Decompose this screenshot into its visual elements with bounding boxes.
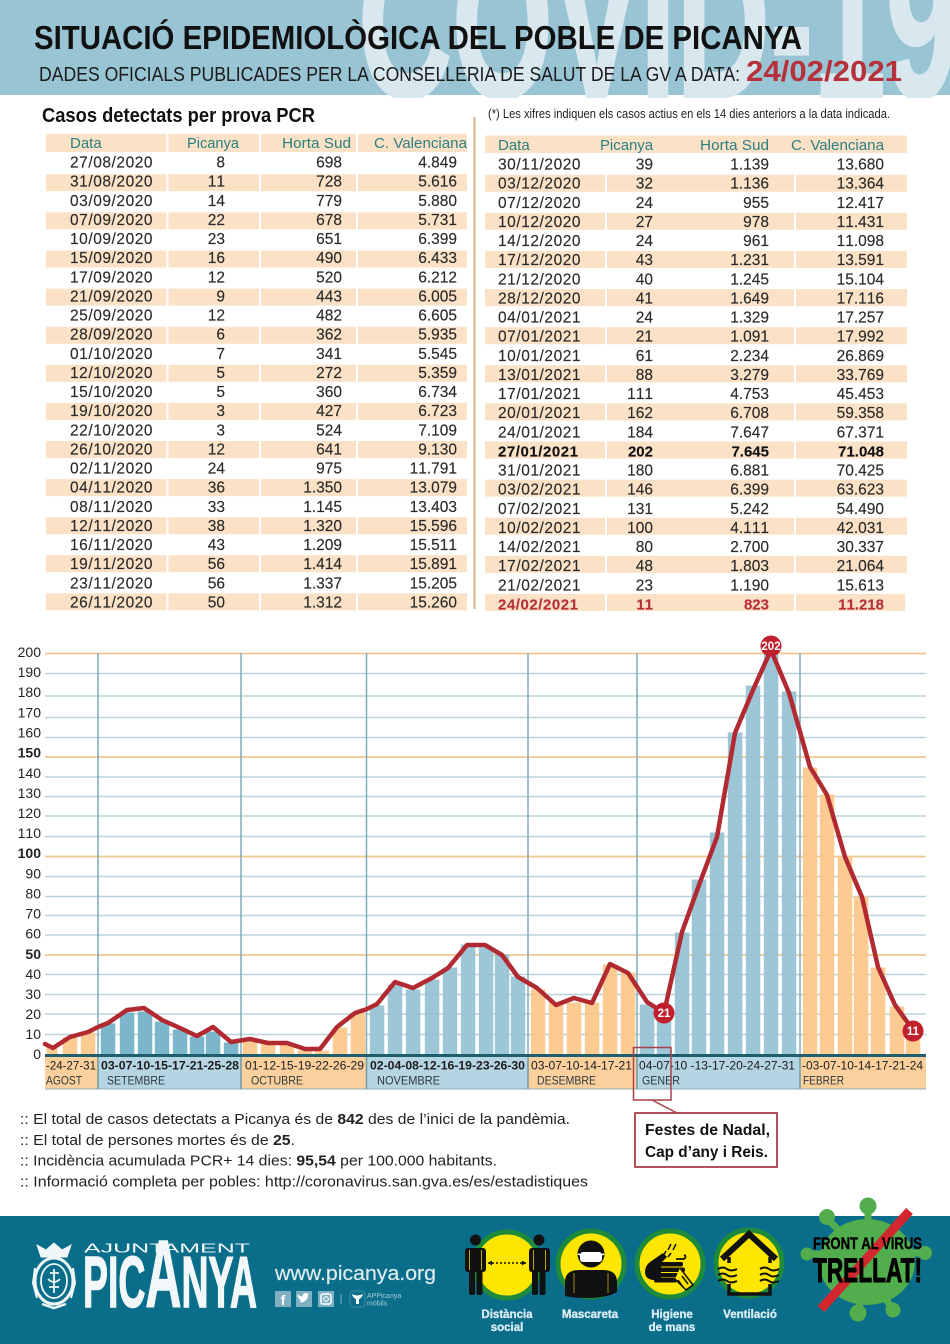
x axis date labels: 04-07-10 -13-17-20-24-27-31 xyxy=(639,1058,795,1072)
panel: left data table xyxy=(46,130,468,615)
y axis labels: 40 xyxy=(25,966,41,982)
left table rows: 6 xyxy=(216,327,225,344)
x axis month labels: NOVEMBRE xyxy=(377,1076,440,1088)
right table rows: 17.116 xyxy=(837,290,884,307)
left table rows: 38 xyxy=(208,518,225,535)
left table rows: 16 xyxy=(208,250,225,267)
left table rows: 03/09/2020 xyxy=(70,193,153,210)
left table header: Horta Sud xyxy=(282,135,351,152)
callout: holidays: Cap d’any i Reis. xyxy=(645,1144,768,1161)
right table rows: 13.591 xyxy=(837,252,884,269)
left table rows: 4.849 xyxy=(418,154,457,172)
right table rows: 15.613 xyxy=(837,577,884,594)
x axis month labels: OCTUBRE xyxy=(251,1076,303,1088)
right table rows: 1.245 xyxy=(730,271,769,288)
x axis month labels: AGOST xyxy=(46,1076,82,1088)
trend line xyxy=(45,650,913,1049)
icon labels: de mans xyxy=(649,1322,695,1334)
left table rows: 5 xyxy=(216,384,225,401)
x axis date labels: -24-27-31 xyxy=(46,1058,96,1072)
logo: Ajuntament Picanya: AJUNTAMENT xyxy=(84,1242,251,1256)
right table rows: 6.399 xyxy=(730,482,769,499)
left table rows: 5.545 xyxy=(418,346,457,363)
right table rows: 21/12/2020 xyxy=(498,271,581,288)
left table rows: 13.403 xyxy=(410,499,457,516)
right table rows: 43 xyxy=(636,252,653,269)
right table rows: 88 xyxy=(636,367,653,384)
right table rows: 1.190 xyxy=(730,577,769,594)
left table rows: 56 xyxy=(208,575,225,592)
y axis labels: 60 xyxy=(25,926,41,942)
left table rows: 31/08/2020 xyxy=(70,174,153,191)
right table rows: 961 xyxy=(743,233,769,250)
right table rows: 67.371 xyxy=(837,424,884,441)
y axis labels xyxy=(18,644,41,1062)
y axis labels: 190 xyxy=(18,664,41,680)
right table rows: 80 xyxy=(636,539,653,556)
left table rows: 15.511 xyxy=(410,537,457,554)
right table rows: 30.337 xyxy=(837,539,884,556)
left table rows: 56 xyxy=(208,556,225,573)
right table rows: 20/01/2021 xyxy=(498,405,581,422)
marker: peak 202 xyxy=(760,636,782,656)
right table rows: 10/12/2020 xyxy=(498,214,581,231)
x axis month labels: SETEMBRE xyxy=(107,1076,165,1088)
left table rows: 6.005 xyxy=(418,288,457,305)
right table rows: 14/02/2021 xyxy=(498,539,581,556)
right table rows: 2.700 xyxy=(730,539,769,556)
x axis date labels: 02-04-08-12-16-19-23-26-30 xyxy=(370,1058,525,1072)
left table rows: 12/11/2020 xyxy=(70,518,153,535)
left table rows: 6.734 xyxy=(418,384,457,401)
y axis labels: 90 xyxy=(25,866,41,882)
icon labels: Ventilació xyxy=(723,1309,777,1321)
left table rows: 9 xyxy=(216,288,225,305)
left table rows: 6.212 xyxy=(418,269,457,286)
right table rows: 54.490 xyxy=(837,501,884,518)
left table rows: 13.079 xyxy=(410,480,457,497)
y axis labels: 50 xyxy=(25,946,41,962)
y axis labels: 10 xyxy=(25,1026,41,1042)
left table rows: 7.109 xyxy=(418,422,457,439)
icon: municipal crest xyxy=(33,1243,75,1308)
left table rows: 427 xyxy=(316,403,342,420)
right table rows: 30/11/2020 xyxy=(498,156,581,174)
left table rows: 443 xyxy=(316,288,342,305)
x axis month labels: DESEMBRE xyxy=(537,1076,596,1088)
right table rows: 978 xyxy=(743,214,769,231)
right table rows: 27 xyxy=(636,214,653,231)
left table rows: 341 xyxy=(316,346,342,363)
icon labels: Mascareta xyxy=(562,1309,619,1321)
right table rows: 63.623 xyxy=(837,482,884,499)
right table header: Horta Sud xyxy=(700,137,769,154)
right table rows: 131 xyxy=(627,501,653,518)
right table rows: 11.431 xyxy=(837,214,884,231)
icon: face mask xyxy=(558,1231,624,1298)
left table rows: 9.130 xyxy=(418,442,457,458)
right table rows: 1.136 xyxy=(730,176,769,193)
icon: social media xyxy=(275,1291,401,1308)
right table rows: 42.031 xyxy=(837,520,884,537)
right table rows: 13.680 xyxy=(837,156,884,174)
left table rows: 12 xyxy=(208,269,225,286)
left table rows: 22/10/2020 xyxy=(70,422,153,439)
left table rows: 15.596 xyxy=(410,518,457,535)
right table rows: 61 xyxy=(636,348,653,365)
right table rows: 32 xyxy=(636,176,653,193)
right table rows: 21/02/2021 xyxy=(498,577,581,594)
left table rows: 43 xyxy=(208,537,225,554)
panel: footer xyxy=(0,1198,950,1344)
right table rows: 40 xyxy=(636,271,653,288)
left table rows: 19/11/2020 xyxy=(70,556,153,573)
left table rows: 15.891 xyxy=(410,556,457,573)
right table rows: 11 xyxy=(636,596,653,614)
left table rows: 3 xyxy=(216,422,225,439)
month bands xyxy=(45,1057,926,1090)
y axis labels: 180 xyxy=(18,684,41,700)
right table rows: 955 xyxy=(743,195,769,212)
left table rows: 490 xyxy=(316,250,342,267)
right table rows: 39 xyxy=(636,156,653,174)
right table rows: 24/02/2021 xyxy=(498,596,579,614)
left table rows: 360 xyxy=(316,384,342,401)
left table rows: 21/09/2020 xyxy=(70,288,153,305)
right table rows: 1.329 xyxy=(730,310,769,326)
left table rows: 5.359 xyxy=(418,365,457,382)
left table header: Picanya xyxy=(187,135,240,152)
right table rows: 21.064 xyxy=(837,558,884,575)
right table rows: 1.091 xyxy=(730,329,769,346)
right table rows: 15.104 xyxy=(837,271,884,288)
icon: social distance xyxy=(465,1232,550,1298)
right table rows: 24 xyxy=(636,195,653,212)
right table rows: 184 xyxy=(627,424,653,441)
y axis labels: 30 xyxy=(25,986,41,1002)
left table rows: 02/11/2020 xyxy=(70,461,153,478)
marker: peak 202: 202 xyxy=(761,641,781,653)
left table rows: 36 xyxy=(208,480,225,497)
website: www.picanya.org xyxy=(274,1262,436,1285)
bars: Picanya active cases xyxy=(47,650,920,1054)
right table rows: 24/01/2021 xyxy=(498,424,581,441)
icon: hand hygiene xyxy=(637,1231,703,1297)
text block: key facts: :: Informació completa per pobles: http://coronavirus.san.gva.es/es/estadistiques xyxy=(20,1174,588,1190)
right table rows: 1.231 xyxy=(730,252,769,269)
left table rows: 975 xyxy=(316,461,342,478)
left table rows: 12 xyxy=(208,308,225,324)
text block: key facts xyxy=(20,1111,588,1190)
right table header: Data xyxy=(498,137,530,154)
x axis line xyxy=(45,1054,926,1057)
left table rows: 26/11/2020 xyxy=(70,594,153,612)
y axis labels: 150 xyxy=(18,744,41,760)
left table rows: 6.723 xyxy=(418,403,457,420)
right table rows: 823 xyxy=(744,596,769,614)
right table rows: 07/12/2020 xyxy=(498,195,581,212)
left table rows: 5 xyxy=(216,365,225,382)
left table rows: 15/10/2020 xyxy=(70,384,153,401)
left table rows: 5.880 xyxy=(418,193,457,210)
x axis date labels: 01-12-15-19-22-26-29 xyxy=(245,1058,364,1072)
left table rows: 1.350 xyxy=(303,480,342,497)
x axis date labels: 03-07-10-14-17-21 xyxy=(531,1058,632,1072)
icon labels: Distància xyxy=(481,1309,533,1321)
right table rows: 7.647 xyxy=(730,424,769,441)
left table rows: 15.205 xyxy=(410,575,457,592)
right table rows: 4.753 xyxy=(730,386,769,403)
y axis labels: 0 xyxy=(33,1046,41,1062)
right table rows: 100 xyxy=(627,520,653,537)
left table rows: 19/10/2020 xyxy=(70,403,153,420)
left table rows: 6.399 xyxy=(418,231,457,248)
right table rows: 17.257 xyxy=(837,310,884,326)
left table rows: 16/11/2020 xyxy=(70,537,153,554)
right table header: C. Valenciana xyxy=(791,137,885,154)
right table rows: 07/01/2021 xyxy=(498,329,581,346)
right table rows: 111 xyxy=(627,386,653,403)
right table rows: 24 xyxy=(636,310,653,326)
marker: 21 xyxy=(654,1002,674,1024)
y axis labels: 130 xyxy=(18,785,41,801)
y axis labels: 160 xyxy=(18,724,41,740)
right table rows: 1.139 xyxy=(730,156,769,174)
left table rows: 6.605 xyxy=(418,308,457,324)
left table rows: 22 xyxy=(208,212,225,229)
right table rows: 1.649 xyxy=(730,290,769,307)
marker: 21: 21 xyxy=(658,1008,671,1020)
y axis labels: 20 xyxy=(25,1006,41,1022)
icon labels xyxy=(481,1309,777,1334)
right table rows: 146 xyxy=(627,482,653,499)
left table rows: 28/09/2020 xyxy=(70,327,153,344)
left table rows: 6.433 xyxy=(418,250,457,267)
y axis labels: 70 xyxy=(25,906,41,922)
x axis date labels xyxy=(46,1058,923,1072)
right table rows: 6.708 xyxy=(730,405,769,422)
right table rows: 48 xyxy=(636,558,653,575)
icon: social media: mòbils xyxy=(367,1300,388,1308)
left table rows: 12 xyxy=(208,442,225,458)
left table rows: 1.337 xyxy=(303,575,342,592)
right table rows: 27/01/2021 xyxy=(498,444,579,460)
right table rows: 71.048 xyxy=(838,444,884,460)
right table rows: 5.242 xyxy=(730,501,769,518)
left table rows: 362 xyxy=(316,327,342,344)
right table rows: 6.881 xyxy=(730,463,769,480)
panel: right data table xyxy=(485,136,907,615)
left table rows: 14 xyxy=(208,193,225,210)
right table rows: 41 xyxy=(636,290,653,307)
left table rows: 15/09/2020 xyxy=(70,250,153,267)
right table rows: 45.453 xyxy=(837,386,884,403)
icon: social media: f xyxy=(281,1292,286,1308)
right table rows: 26.869 xyxy=(837,348,884,365)
text block: key facts: :: El total de casos detectats a Picanya és de 842 des de l’inici de la pandèmia. xyxy=(20,1111,570,1128)
right table rows: 28/12/2020 xyxy=(498,290,581,307)
left table rows: 25/09/2020 xyxy=(70,308,153,324)
right table rows: 2.234 xyxy=(730,348,769,365)
panel: header banner xyxy=(0,0,950,98)
right table rows: 17/12/2020 xyxy=(498,252,581,269)
y axis labels: 100 xyxy=(18,845,41,861)
left table rows: 524 xyxy=(316,422,342,439)
left table header: Data xyxy=(70,135,102,152)
icon: virus with slogan xyxy=(800,1198,932,1322)
left table rows: 5.616 xyxy=(418,174,457,191)
left table rows: 07/09/2020 xyxy=(70,212,153,229)
right table rows: 04/01/2021 xyxy=(498,310,581,326)
right table rows: 24 xyxy=(636,233,653,250)
marker: 11: 11 xyxy=(907,1026,920,1038)
icon: ventilation xyxy=(716,1230,782,1296)
right table rows: 202 xyxy=(628,444,653,460)
right table rows: 31/01/2021 xyxy=(498,463,581,480)
right table rows: 17.992 xyxy=(837,329,884,346)
heading: PCR cases: Casos detectats per prova PCR xyxy=(42,104,315,127)
panel: cases chart xyxy=(18,636,926,1090)
left table rows: 26/10/2020 xyxy=(70,442,153,458)
left table rows: 50 xyxy=(208,594,225,612)
callout: holidays xyxy=(634,1048,777,1167)
right table rows: 12.417 xyxy=(837,195,884,212)
left table rows: 1.320 xyxy=(303,518,342,535)
right table rows: 162 xyxy=(627,405,653,422)
right table rows: 4.111 xyxy=(730,520,769,537)
left table rows: 7 xyxy=(216,346,225,363)
left table rows: 1.312 xyxy=(303,594,342,612)
logo: Ajuntament Picanya: PICANYA xyxy=(83,1222,257,1328)
left table rows: 779 xyxy=(316,193,342,210)
y axis labels: 120 xyxy=(18,805,41,821)
left table rows: 17/09/2020 xyxy=(70,269,153,286)
divider between tables xyxy=(474,117,476,609)
left table rows: 641 xyxy=(316,442,342,458)
y axis labels: 200 xyxy=(18,644,41,660)
left table rows: 11.791 xyxy=(410,461,457,478)
right table rows: 13/01/2021 xyxy=(498,367,581,384)
left table rows: 1.209 xyxy=(303,537,342,554)
left table rows: 24 xyxy=(208,461,225,478)
right table rows: 10/02/2021 xyxy=(498,520,581,537)
right table rows: 59.358 xyxy=(837,405,884,422)
right table rows: 14/12/2020 xyxy=(498,233,581,250)
x axis month labels: GENER xyxy=(642,1076,680,1088)
right table rows: 10/01/2021 xyxy=(498,348,581,365)
y axis labels: 140 xyxy=(18,765,41,781)
right table rows: 1.803 xyxy=(730,558,769,575)
left table rows: 10/09/2020 xyxy=(70,231,153,248)
left table rows: 23 xyxy=(208,231,225,248)
left table rows: 520 xyxy=(316,269,342,286)
left table rows: 15.260 xyxy=(410,594,457,612)
right table rows: 03/02/2021 xyxy=(498,482,581,499)
left table rows: 3 xyxy=(216,403,225,420)
report date: 24/02/2021 xyxy=(746,56,902,88)
left table rows xyxy=(70,154,457,612)
text block: key facts: :: El total de persones mortes és de 25. xyxy=(20,1132,295,1149)
right table rows: 13.364 xyxy=(837,176,884,193)
left table rows: 651 xyxy=(316,231,342,248)
right table rows: 70.425 xyxy=(837,463,884,480)
y axis labels: 170 xyxy=(18,704,41,720)
icon labels: social xyxy=(491,1322,523,1334)
right table header: Picanya xyxy=(600,137,654,154)
left table rows: 12/10/2020 xyxy=(70,365,153,382)
right table rows: 3.279 xyxy=(730,367,769,384)
marker: 11 xyxy=(902,1020,924,1042)
callout: holidays: Festes de Nadal, xyxy=(645,1122,770,1139)
right table rows: 11.098 xyxy=(837,233,884,250)
right table rows: 17/02/2021 xyxy=(498,558,581,575)
left table rows: 01/10/2020 xyxy=(70,346,153,363)
left table rows: 23/11/2020 xyxy=(70,575,153,592)
right table rows: 17/01/2021 xyxy=(498,386,581,403)
right table rows: 7.645 xyxy=(731,444,769,460)
x axis month labels: FEBRER xyxy=(803,1076,844,1088)
left table rows: 678 xyxy=(316,212,342,229)
title: SITUACIÓ EPIDEMIOLÒGICA DEL POBLE DE PICANYA xyxy=(34,19,802,56)
right table rows: 21 xyxy=(636,329,653,346)
left table rows: 698 xyxy=(316,154,342,172)
left table rows: 11 xyxy=(208,174,225,191)
y axis labels: 80 xyxy=(25,886,41,902)
right table rows: 33.769 xyxy=(837,367,884,384)
x axis month labels xyxy=(46,1076,844,1088)
right table rows: 03/12/2020 xyxy=(498,176,581,193)
x axis date labels: 03-07-10-15-17-21-25-28 xyxy=(101,1058,239,1072)
left table rows: 33 xyxy=(208,499,225,516)
text block: key facts: :: Incidència acumulada PCR+ 14 dies: 95,54 per 100.000 habitants. xyxy=(20,1152,497,1170)
left table rows: 272 xyxy=(316,365,342,382)
left table rows: 5.935 xyxy=(418,327,457,344)
left table header xyxy=(70,135,468,152)
left table rows: 5.731 xyxy=(418,212,457,229)
y axis labels: 110 xyxy=(18,825,41,841)
left table rows: 27/08/2020 xyxy=(70,154,153,172)
subtitle: DADES OFICIALS PUBLICADES PER LA CONSELLERIA DE SALUT DE LA GV A DATA: xyxy=(39,64,740,86)
right table rows: 180 xyxy=(627,463,653,480)
left table header: C. Valenciana xyxy=(374,135,468,152)
icon labels: Higiene xyxy=(651,1309,693,1321)
left table rows: 482 xyxy=(316,308,342,324)
x axis date labels: -03-07-10-14-17-21-24 xyxy=(802,1058,923,1072)
left table rows: 8 xyxy=(216,154,225,172)
left table rows: 728 xyxy=(316,174,342,191)
right table rows xyxy=(498,156,884,614)
left table rows: 1.414 xyxy=(303,556,342,573)
left table rows: 04/11/2020 xyxy=(70,480,153,497)
icon: social media: APPicanya xyxy=(367,1293,401,1300)
left table rows: 08/11/2020 xyxy=(70,499,153,516)
note: active cases: (*) Les xifres indiquen els casos actius en els 14 dies anteriors a la data indicada. xyxy=(488,106,890,121)
right table rows: 23 xyxy=(636,577,653,594)
left table rows: 1.145 xyxy=(303,499,342,516)
right table rows: 07/02/2021 xyxy=(498,501,581,518)
right table header xyxy=(498,137,885,154)
right table rows: 11.218 xyxy=(838,596,884,614)
